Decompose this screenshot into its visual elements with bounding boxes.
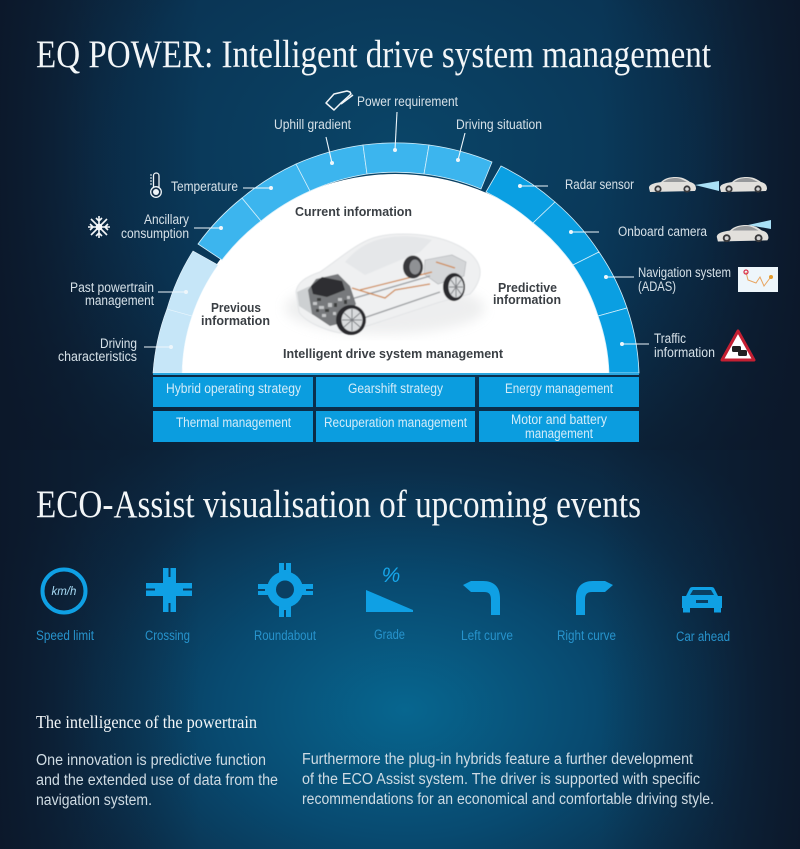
- engine block: [308, 274, 356, 326]
- icon: crossing: [146, 568, 192, 612]
- icon: pedal: [326, 91, 353, 110]
- heading: predictive information: information: [493, 293, 561, 307]
- text block: left column: One innovation is predictive function: [36, 752, 266, 769]
- heading: intelligent drive system management: Intelligent drive system management: [283, 347, 504, 361]
- label: ancillary consumption: [121, 212, 189, 241]
- label: navigation system: [638, 265, 731, 294]
- arc: previous information: [153, 251, 218, 373]
- label: driving situation: Driving situation: [456, 117, 542, 132]
- heading: previous information: information: [201, 314, 270, 328]
- icon: radar cars: [649, 177, 767, 193]
- box: energy management: [479, 377, 639, 407]
- box: thermal management: [153, 411, 313, 442]
- car body shell: [296, 234, 480, 333]
- car windows: [345, 236, 432, 275]
- box: motor and battery management: Motor and battery: [511, 412, 607, 427]
- arc: current information: [198, 143, 492, 260]
- label: navigation system: Navigation system: [638, 265, 731, 280]
- label: driving characteristics: Driving: [100, 336, 137, 351]
- heading: previous information: Previous: [211, 301, 261, 315]
- heading: predictive information: Predictive: [498, 281, 557, 295]
- label: traffic information: Traffic: [654, 331, 686, 346]
- leader lines and dots: [144, 112, 649, 349]
- front wheel: [336, 305, 366, 335]
- label: past powertrain management: management: [85, 293, 154, 308]
- far wheel: [403, 256, 423, 278]
- label: traffic information: [654, 331, 715, 360]
- icon: snowflake: [88, 216, 110, 238]
- car cutaway illustration: [285, 234, 485, 335]
- box: recuperation management: Recuperation management: [324, 415, 467, 430]
- icon labels: Crossing: [145, 628, 190, 643]
- icon: camera car: [717, 220, 771, 242]
- text block: left column: navigation system.: [36, 792, 152, 809]
- rear wheel: [443, 273, 465, 301]
- icon: traffic warning sign: [722, 331, 754, 360]
- icon: grade: [366, 564, 413, 612]
- label: onboard camera: Onboard camera: [618, 224, 707, 239]
- heading: predictive information: [493, 281, 561, 307]
- icon: car ahead: [682, 587, 722, 612]
- text block: right column: Furthermore the plug-in hybrids feature a further development: [302, 751, 694, 768]
- rear battery unit: [424, 255, 466, 284]
- text block: left column: and the extended use of data from the: [36, 772, 278, 789]
- label: ancillary consumption: consumption: [121, 226, 189, 241]
- icon labels: Roundabout: [254, 628, 316, 643]
- icon labels: Grade: [374, 627, 405, 642]
- icon: grade: %: [382, 564, 400, 587]
- icon: speed limit: [42, 570, 86, 612]
- engine front grille: [297, 286, 313, 315]
- box: hybrid operating strategy: [153, 377, 313, 407]
- label: past powertrain management: [70, 280, 154, 308]
- label: radar sensor: Radar sensor: [565, 177, 634, 192]
- baseline bar: [153, 373, 639, 375]
- label: ancillary consumption: Ancillary: [144, 212, 189, 227]
- inner white semicircle: [182, 174, 609, 373]
- icon labels: Speed limit: [36, 628, 94, 643]
- chassis rails: [348, 276, 440, 322]
- box: recuperation management: [316, 411, 475, 442]
- label: driving characteristics: [58, 336, 137, 364]
- heading: previous information: [201, 301, 270, 328]
- car shadow: [285, 282, 485, 334]
- icon: roundabout: [258, 563, 313, 617]
- box: thermal management: Thermal management: [176, 415, 291, 430]
- icon labels: Right curve: [557, 628, 616, 643]
- output boxes: [153, 377, 639, 442]
- panel: semicircle diagram: [144, 112, 649, 375]
- icon labels: [36, 627, 730, 644]
- label: past powertrain management: Past powertrain: [70, 280, 154, 295]
- icon: navigation map: [738, 267, 778, 292]
- box: motor and battery management: [479, 411, 639, 442]
- box: gearshift strategy: Gearshift strategy: [348, 381, 443, 396]
- subheading: The intelligence of the powertrain: [36, 712, 257, 732]
- text block: left column: [36, 752, 278, 809]
- section title: ECO-Assist visualisation of upcoming events: [36, 483, 641, 526]
- background: top panel: [0, 0, 800, 450]
- background: bottom panel: [0, 450, 800, 849]
- label: traffic information: information: [654, 345, 715, 360]
- box: hybrid operating strategy: Hybrid operating strategy: [166, 381, 301, 396]
- icon: thermometer: [150, 173, 161, 197]
- box: gearshift strategy: [316, 377, 475, 407]
- label: temperature: Temperature: [171, 179, 238, 194]
- icon: right curve: [576, 581, 613, 615]
- box: energy management: Energy management: [505, 381, 613, 396]
- box: motor and battery management: management: [525, 426, 593, 441]
- text block: right column: of the ECO Assist system. The driver is supported with specific: [302, 771, 700, 788]
- label: driving characteristics: characteristics: [58, 349, 137, 364]
- arc: predictive information: [486, 166, 639, 373]
- text block: right column: [302, 751, 714, 808]
- label: uphill gradient: Uphill gradient: [274, 117, 351, 132]
- orange high-voltage cables: [352, 262, 455, 298]
- label: power requirement: Power requirement: [357, 94, 458, 109]
- icon labels: Left curve: [461, 628, 513, 643]
- heading: current information: Current information: [295, 205, 412, 219]
- icon: speed limit: km/h: [52, 586, 76, 598]
- icon labels: Car ahead: [676, 629, 730, 644]
- text block: right column: recommendations for an economical and comfortable driving style.: [302, 791, 714, 808]
- icon: left curve: [463, 581, 500, 615]
- label: navigation system: (ADAS): [638, 279, 676, 294]
- engine detail: [313, 296, 350, 317]
